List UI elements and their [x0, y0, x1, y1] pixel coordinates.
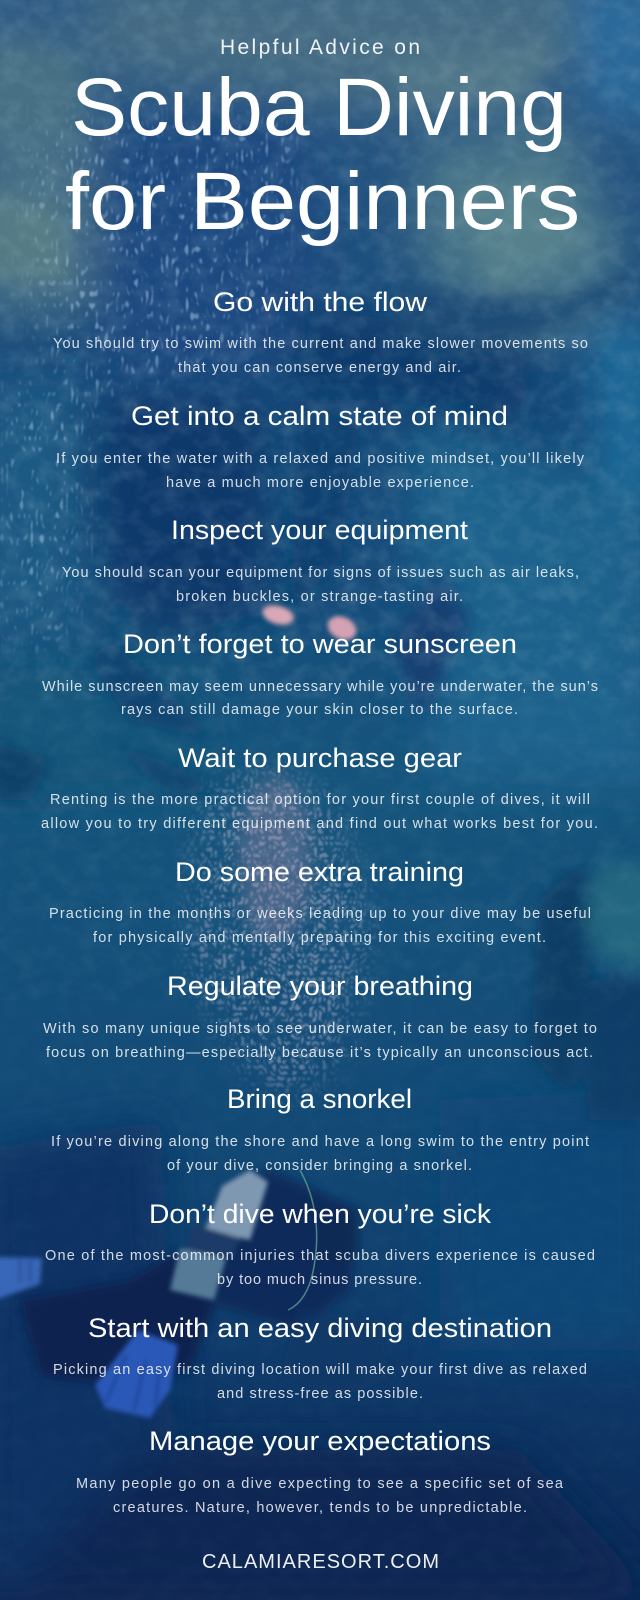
- tip: manage expectations: [76, 1426, 564, 1516]
- header: [65, 36, 580, 247]
- water texture: [0, 0, 640, 1000]
- air hose: [288, 1170, 317, 1310]
- tip: don't dive sick: [45, 1199, 595, 1288]
- tip: don't dive sick: by too much sinus pressure.: [217, 1272, 422, 1288]
- tip: extra training: for physically and mentally preparing for this exciting event.: [93, 930, 546, 946]
- tip: extra training: Practicing in the months or weeks leading up to your dive may be useful: [49, 906, 591, 922]
- tip: regulate breathing: Regulate your breathing: [167, 971, 473, 1001]
- tip: bring a snorkel: of your dive, consider bringing a snorkel.: [167, 1158, 472, 1174]
- tip: don't dive sick: Don’t dive when you’re sick: [149, 1199, 492, 1229]
- tip: don't dive sick: One of the most-common injuries that scuba divers experience is caused: [45, 1248, 595, 1264]
- blue fin left: [0, 1257, 42, 1300]
- tip: go with the flow: that you can conserve energy and air.: [178, 360, 461, 376]
- tip: wait to purchase gear: [41, 743, 598, 832]
- tip: easy destination: Start with an easy diving destination: [88, 1313, 552, 1343]
- tip: regulate breathing: With so many unique sights to see underwater, it can be easy to forget to: [43, 1021, 597, 1037]
- tip: calm state of mind: Get into a calm state of mind: [131, 401, 508, 431]
- pink glow of bubble stream: [239, 775, 311, 945]
- tip: easy destination: Picking an easy first diving location will make your first dive as relaxed: [53, 1362, 587, 1378]
- tip: easy destination: [53, 1313, 587, 1402]
- diver: [0, 1170, 390, 1418]
- tip: regulate breathing: focus on breathing—especially because it’s typically an unconscious act.: [46, 1045, 593, 1061]
- tip: bring a snorkel: Bring a snorkel: [227, 1084, 412, 1114]
- tip: easy destination: and stress-free as possible.: [217, 1386, 423, 1402]
- tip: wear sunscreen: [42, 629, 598, 718]
- tip: wear sunscreen: Don’t forget to wear sunscreen: [123, 629, 517, 659]
- tip: go with the flow: [53, 287, 588, 376]
- tip: wait to purchase gear: Renting is the more practical option for your first couple of dives, it will: [50, 792, 590, 808]
- tip: manage expectations: Manage your expectations: [149, 1426, 491, 1456]
- tip: calm state of mind: [56, 401, 585, 491]
- tip: extra training: [49, 857, 591, 946]
- tip: go with the flow: You should try to swim with the current and make slower movements so: [53, 336, 588, 352]
- tip: inspect your equipment: [62, 515, 579, 605]
- tip: calm state of mind: If you enter the water with a relaxed and positive mindset, you’ll likely: [56, 451, 585, 467]
- tip: inspect your equipment: broken buckles, or strange-tasting air.: [176, 589, 463, 605]
- tip: wear sunscreen: rays can still damage your skin closer to the surface.: [121, 702, 518, 718]
- tip: manage expectations: Many people go on a dive expecting to see a specific set of sea: [76, 1476, 564, 1492]
- tip: regulate breathing: [43, 971, 597, 1061]
- tip: bring a snorkel: If you’re diving along the shore and have a long swim to the entry point: [51, 1134, 589, 1150]
- rock detail: [0, 40, 640, 1120]
- rising bubbles: left column: [0, 120, 300, 640]
- tip: inspect your equipment: Inspect your equipment: [171, 515, 469, 545]
- footer website: CALAMIARESORT.COM: [202, 1551, 439, 1573]
- tip: bring a snorkel: [51, 1084, 589, 1174]
- tip: go with the flow: Go with the flow: [213, 287, 428, 317]
- pink air pockets: [260, 602, 360, 644]
- tip: calm state of mind: have a much more enjoyable experience.: [166, 475, 474, 491]
- tip: wait to purchase gear: allow you to try different equipment and find out what works best for you.: [41, 816, 598, 832]
- subtitle: Helpful Advice on: [220, 36, 420, 59]
- title line 2: for Beginners: [65, 156, 580, 247]
- tip: extra training: Do some extra training: [175, 857, 464, 887]
- tip: wait to purchase gear: Wait to purchase gear: [178, 743, 462, 773]
- rising bubbles: pink stream: [190, 770, 370, 1100]
- tip: wear sunscreen: While sunscreen may seem unnecessary while you’re underwater, the sun’s: [42, 679, 598, 695]
- scuba tank: [170, 1170, 268, 1300]
- title line 1: Scuba Diving: [71, 62, 567, 153]
- blue fin right: [95, 1330, 178, 1418]
- tip: manage expectations: creatures. Nature, however, tends to be unpredictable.: [113, 1500, 527, 1516]
- diver body: [20, 1170, 390, 1400]
- tip: inspect your equipment: You should scan your equipment for signs of issues such as air leaks,: [62, 565, 579, 581]
